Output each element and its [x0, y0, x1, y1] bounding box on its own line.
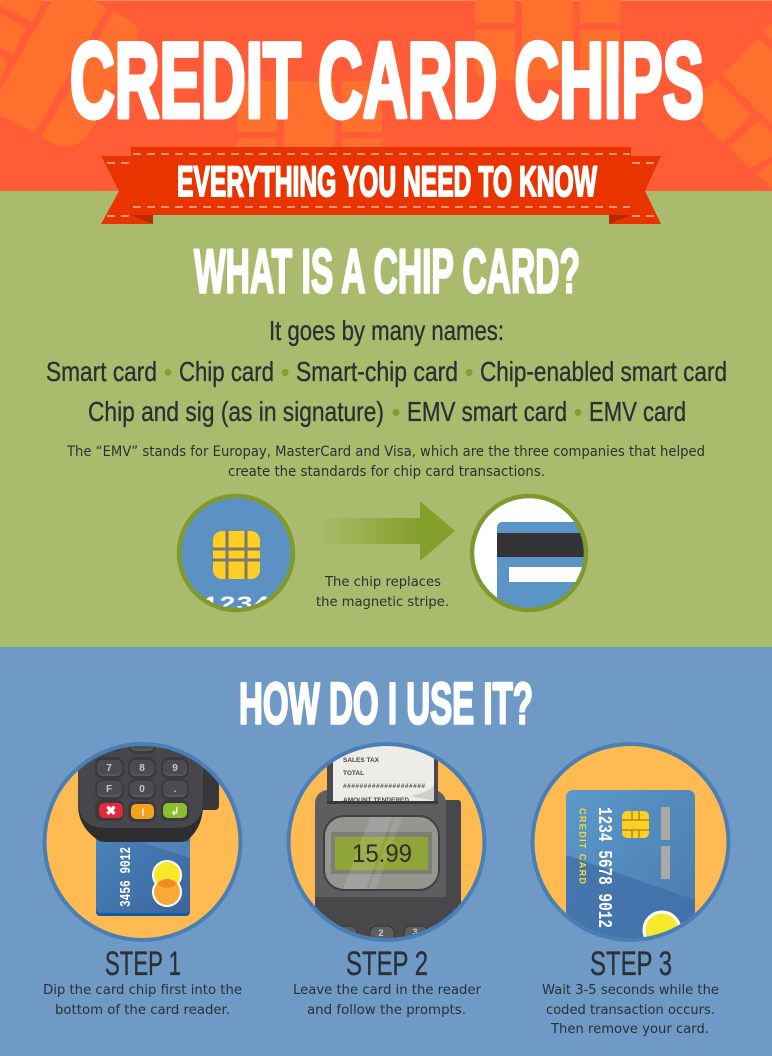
- receipt: AMOUNT TENDERED: [343, 797, 409, 804]
- step 3 text: STEP 3: [590, 945, 672, 983]
- card: [96, 838, 190, 916]
- arrow: [315, 501, 455, 561]
- step 1 text: bottom of the card reader.: [55, 1002, 230, 1018]
- step 2 text: and follow the prompts.: [307, 1002, 466, 1018]
- icon: card chip circle: 1234: [202, 594, 270, 617]
- panel: green section background: [0, 191, 772, 647]
- text block: names of chip cards: •: [573, 397, 583, 427]
- illustration: step 2 terminal with receipt: 1: [343, 929, 349, 939]
- step 3 text: Then remove your card.: [550, 1021, 709, 1037]
- receipt: [333, 746, 434, 801]
- panel: header background: [0, 0, 772, 192]
- receipt: ####################: [343, 783, 425, 790]
- step 2 text: Leave the card in the reader: [293, 982, 481, 998]
- reader: 9: [172, 763, 178, 774]
- step 1 text: STEP 1: [105, 945, 181, 983]
- text block: names of chip cards: •: [163, 357, 173, 387]
- reader: 8: [139, 763, 145, 774]
- illustration: step 2 terminal with receipt: 3: [412, 927, 418, 937]
- step 3 text: [542, 945, 719, 1037]
- text block: EMV explanation: The “EMV” stands for Europay, MasterCard and Visa, which are the three companies that helped: [66, 444, 705, 460]
- reader: 7: [106, 763, 112, 774]
- panel: blue section background: [0, 647, 772, 1056]
- ribbon banner: [101, 147, 661, 224]
- icon: card chip circle: [179, 496, 293, 617]
- step 3 text: Wait 3-5 seconds while the: [542, 982, 719, 998]
- icon: magnetic stripe circle: [470, 494, 588, 612]
- text block: names of chip cards: EMV smart card: [407, 396, 567, 427]
- text block: names of chip cards: •: [391, 397, 401, 427]
- caption: chip replaces stripe: the magnetic stripe.: [316, 594, 449, 610]
- keypad: [315, 897, 446, 938]
- illustration: step 3 card removed: [532, 744, 728, 950]
- text block: names of chip cards: Chip and sig (as in signature): [88, 396, 384, 427]
- text block: EMV explanation: create the standards for chip card transactions.: [228, 464, 545, 480]
- step 2 text: [293, 945, 481, 1018]
- text block: EMV explanation: [66, 444, 705, 480]
- step 1 text: Dip the card chip first into the: [43, 982, 242, 998]
- illustration: step 1 card dipped in reader: [44, 730, 240, 940]
- text block: names of chip cards: •: [464, 357, 474, 387]
- caption: chip replaces stripe: [316, 574, 449, 610]
- reader: !: [141, 807, 145, 819]
- heading: how do I use it: HOW DO I USE IT?: [239, 672, 533, 736]
- reader: ✖: [106, 803, 117, 818]
- text block: names of chip cards: It goes by many names:: [269, 315, 504, 346]
- text block: names of chip cards: EMV card: [589, 396, 686, 427]
- reader: .: [174, 784, 177, 795]
- caption: chip replaces stripe: The chip replaces: [324, 574, 441, 590]
- illustration: step 3 card removed: CREDIT CARD: [578, 808, 588, 885]
- receipt: TOTAL: [343, 770, 364, 777]
- reader: ↲: [170, 805, 180, 818]
- text block: names of chip cards: Chip card: [179, 356, 274, 387]
- illustration: step 2 terminal with receipt: 2: [378, 928, 384, 938]
- screen: [324, 816, 439, 890]
- step 3 text: coded transaction occurs.: [546, 1002, 715, 1018]
- screen: 15.99: [352, 840, 412, 868]
- step 2 text: STEP 2: [346, 945, 428, 983]
- chip: [622, 811, 649, 838]
- reader: F: [106, 784, 112, 795]
- text block: names of chip cards: •: [280, 357, 290, 387]
- reader: [78, 746, 219, 842]
- text block: names of chip cards: Smart card: [46, 356, 157, 387]
- illustration: step 2 terminal with receipt: [288, 735, 484, 950]
- reader: 0: [139, 784, 145, 795]
- receipt: SALES TAX: [343, 757, 380, 764]
- text block: names of chip cards: Smart-chip card: [296, 356, 458, 387]
- step 1 text: [43, 945, 242, 1018]
- card: 3456 9012: [118, 847, 135, 907]
- illustration: step 3 card removed: 1234 5678 9012: [593, 807, 615, 928]
- text block: names of chip cards: [46, 315, 727, 427]
